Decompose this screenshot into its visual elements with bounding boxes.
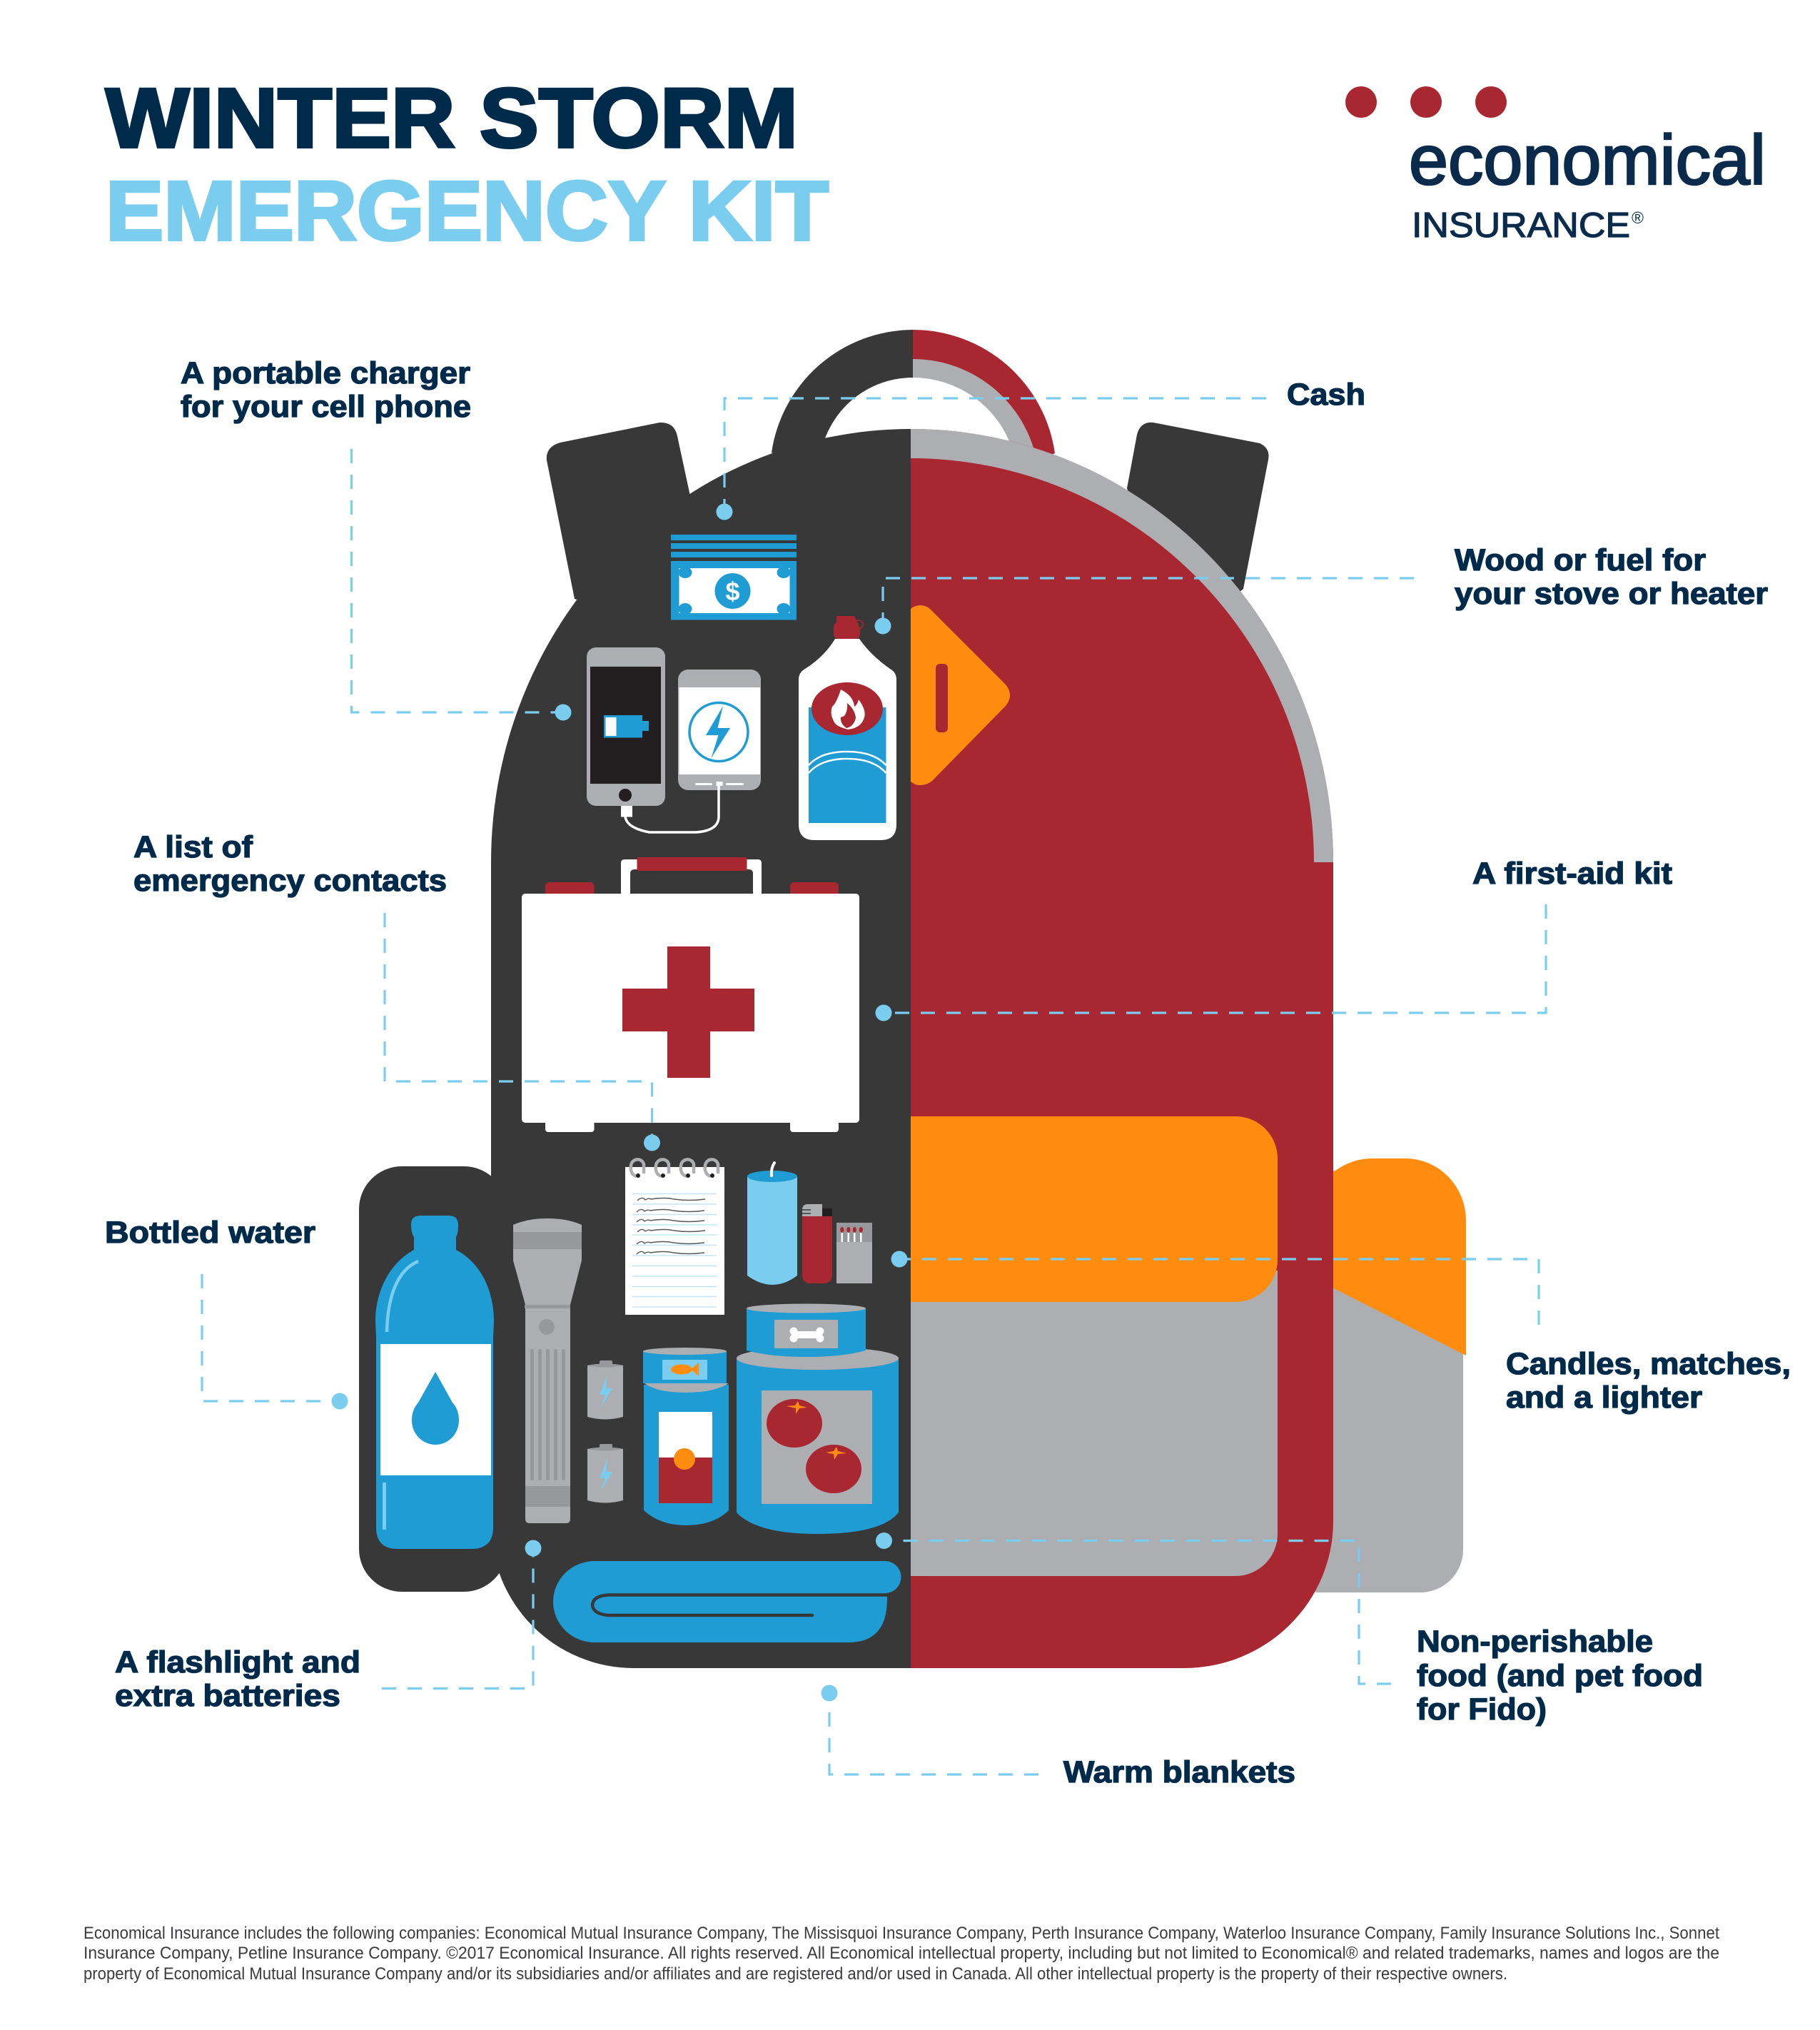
icon: portable charger with cable	[621, 670, 761, 832]
backpack body red half	[911, 429, 1333, 1668]
label: charger: for your cell phone	[181, 390, 471, 424]
icon: flashlight	[513, 1218, 582, 1523]
label: food: food (and pet food	[1417, 1659, 1703, 1693]
footer legal text: Economical Insurance includes the following companies: Economical Mutual Insurance Company, The Missisquoi Insurance Company, Perth Insurance Company, Waterloo Insurance Company, Family Insurance Solutions Inc., Sonnet	[84, 1924, 1719, 1943]
icon: first-aid kit	[522, 857, 859, 1132]
icon: cash: $	[725, 577, 740, 606]
label: first-aid kit: A first-aid kit	[1472, 857, 1672, 891]
backpack	[359, 330, 1466, 1668]
icon: cash	[671, 535, 797, 620]
backpack body dark half	[491, 429, 911, 1668]
right side pocket	[1278, 1158, 1466, 1592]
front pocket orange flap	[911, 1116, 1278, 1302]
icon: matches	[836, 1223, 872, 1283]
grey zipper band	[911, 429, 1333, 862]
label: wood or fuel: Wood or fuel for	[1455, 543, 1706, 577]
footer legal text: Insurance Company, Petline Insurance Company. ©2017 Economical Insurance. All rights reserved. All Economical intellectual property, including but not limited to Economical® and related trademarks, names and logos are the	[84, 1944, 1719, 1963]
top handle	[772, 330, 1055, 514]
connector: flashlight	[382, 1540, 541, 1689]
icon: batteries	[587, 1360, 623, 1503]
label: wood or fuel: your stove or heater	[1455, 577, 1768, 611]
logo: economical insurance: ®	[1632, 208, 1644, 227]
icon: folded blanket	[553, 1561, 901, 1642]
label: charger: A portable charger	[181, 356, 470, 390]
logo: economical insurance	[1345, 86, 1766, 245]
icon: fuel bottle	[799, 616, 896, 840]
label: candles: Candles, matches,	[1506, 1347, 1791, 1381]
backpack straps	[547, 423, 1269, 642]
connector: food	[876, 1532, 1391, 1684]
left side pocket	[359, 1166, 507, 1592]
label: food: Non-perishable	[1417, 1625, 1653, 1659]
front pocket grey	[911, 1271, 1278, 1576]
label: candles: and a lighter	[1506, 1380, 1702, 1415]
label: flashlight: extra batteries	[115, 1679, 340, 1713]
label: bottled water: Bottled water	[105, 1216, 315, 1250]
label: food: for Fido)	[1417, 1692, 1547, 1727]
logo: economical insurance: INSURANCE	[1412, 206, 1630, 245]
icon: large can with bone lid and tomatoes	[737, 1303, 899, 1534]
icon: water bottle	[375, 1216, 494, 1549]
icon: contacts notebook	[625, 1159, 724, 1315]
connector: cash	[717, 398, 1266, 520]
icon: cell phone	[587, 647, 665, 806]
title	[106, 71, 829, 258]
connector: contacts	[385, 913, 660, 1151]
icon: small can of pet fish food	[643, 1348, 729, 1525]
icon: candle	[747, 1163, 797, 1285]
connector: bottled water	[202, 1274, 348, 1409]
label: contacts: emergency contacts	[133, 864, 447, 898]
zipper tag	[911, 605, 1010, 785]
title: WINTER STORM	[106, 71, 798, 166]
label: contacts: A list of	[133, 830, 253, 864]
connector: first-aid kit	[875, 904, 1546, 1021]
connector: candles	[891, 1251, 1539, 1325]
label: cash: Cash	[1287, 378, 1365, 412]
label: blankets: Warm blankets	[1063, 1755, 1295, 1789]
label: flashlight: A flashlight and	[115, 1645, 360, 1680]
connector: blankets	[821, 1685, 1038, 1774]
connector: charger	[351, 449, 571, 721]
connector: wood or fuel	[875, 578, 1414, 634]
logo: economical insurance: economical	[1409, 121, 1766, 199]
icon: lighter	[802, 1204, 832, 1283]
title: EMERGENCY KIT	[106, 164, 829, 258]
footer legal text: property of Economical Mutual Insurance Company and/or its subsidiaries and/or affiliates and are registered and/or used in Canada. All other intellectual property is the property of their respective owners.	[84, 1964, 1507, 1984]
